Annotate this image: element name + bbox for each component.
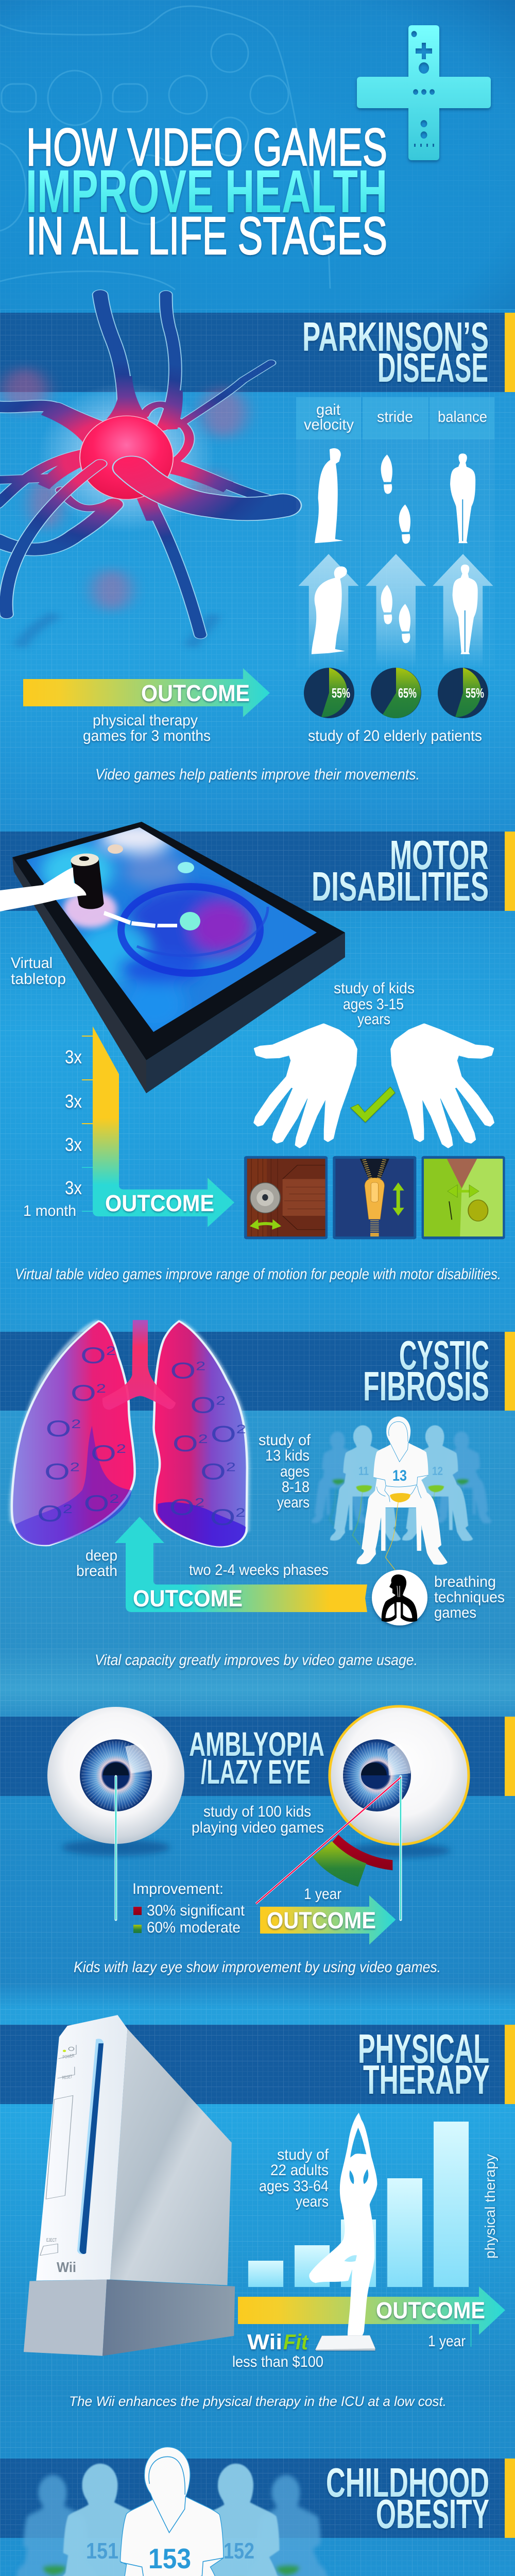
text: study of 13 kids <box>259 1432 311 1511</box>
player numbers: 13 <box>392 1467 407 1484</box>
heading: AMBLYOPIA <box>189 1725 324 1763</box>
trachea <box>102 1320 176 1410</box>
panel: physical therapy <box>0 2015 515 2409</box>
peg <box>70 852 104 909</box>
oxygen labels <box>37 1343 246 1530</box>
illustration: normal eye <box>47 1707 184 1856</box>
console labels: POWER <box>62 2053 75 2060</box>
legend: 30% significant <box>147 1902 245 1919</box>
text: study of 100 kids: study of 100 kids <box>203 1803 311 1820</box>
console labels: Wii <box>57 2259 76 2275</box>
tile: door lock <box>244 1156 328 1239</box>
accent bar <box>505 1332 515 1411</box>
oxygen labels: 2 <box>70 1460 80 1474</box>
panel: header <box>0 0 515 309</box>
text: 1 year: 1 year <box>304 1886 341 1903</box>
game dots <box>104 844 200 930</box>
logo: Wii Fit: Fit <box>283 2330 309 2354</box>
accent bar <box>505 1717 515 1796</box>
panel: amblyopia <box>0 1706 515 1976</box>
illustration: seated players <box>4 2447 343 2576</box>
oxygen labels: 2 <box>236 1422 246 1436</box>
oxygen labels: 2 <box>109 1492 119 1506</box>
text: study of 22 adults: ages 33-64 <box>259 2178 329 2195</box>
oxygen labels: O <box>211 1421 236 1447</box>
text: study of 13 kids: 8-18 <box>282 1479 310 1496</box>
player numbers: 151 <box>86 2538 118 2564</box>
oxygen labels: O <box>37 1501 63 1527</box>
chart: improvement wedges <box>313 1835 392 1887</box>
caption: Kids with lazy eye show improvement by using video games. <box>74 1959 441 1976</box>
text: breathing techniques games: games <box>434 1604 476 1621</box>
caption: Vital capacity greatly improves by video game usage. <box>95 1652 418 1669</box>
label: virtual tabletop: Virtual <box>11 955 53 972</box>
column label: gait velocity: gait <box>316 401 341 418</box>
caption: The Wii enhances the physical therapy in the ICU at a low cost. <box>69 2394 447 2409</box>
text: price: less than $100 <box>232 2353 323 2370</box>
section band <box>0 2459 515 2538</box>
gaze lines <box>116 1776 401 1920</box>
oxygen labels: 2 <box>195 1496 204 1510</box>
text: study of 13 kids: ages <box>280 1463 310 1480</box>
oxygen labels: O <box>46 1415 71 1442</box>
icon: tree pose figure <box>309 2113 377 2342</box>
illustration: seated players <box>312 1416 492 1570</box>
oxygen labels: 2 <box>96 1382 106 1395</box>
background controller outline <box>0 6 330 290</box>
player numbers: 152 <box>224 2538 254 2564</box>
oxygen labels: O <box>71 1380 96 1406</box>
timeline labels: 3x <box>65 1046 82 1067</box>
heading <box>358 2026 490 2103</box>
logo: Wii Fit <box>247 2330 309 2354</box>
section band <box>0 1332 515 1411</box>
text: study of kids: study of kids <box>334 980 415 997</box>
section band <box>0 832 515 911</box>
text: therapy duration: games for 3 months <box>83 727 211 744</box>
oxygen labels: 2 <box>63 1502 73 1516</box>
section band <box>0 1717 515 1796</box>
arrow: outcome <box>115 1517 367 1612</box>
text: deep breath <box>76 1547 117 1580</box>
panel: Parkinson's disease <box>0 295 515 783</box>
oxygen labels: O <box>91 1440 116 1466</box>
oxygen labels: 2 <box>226 1460 236 1474</box>
text: study of 22 adults <box>259 2146 329 2210</box>
column label: gait velocity: velocity <box>304 416 354 433</box>
oxygen labels: 2 <box>71 1417 81 1431</box>
arrow: monthly timeline <box>82 1026 234 1227</box>
text: study of kids <box>334 980 415 1028</box>
console labels: EJECT <box>46 2238 57 2243</box>
pie chart: balance 55% <box>438 668 488 718</box>
icon: check mark <box>351 1087 395 1122</box>
text: study of 22 adults: years <box>296 2193 329 2210</box>
text: therapy duration: physical therapy <box>93 712 198 729</box>
icon: Wii remote cross <box>357 25 491 160</box>
text: study of 13 kids: 13 kids <box>265 1447 310 1464</box>
timeline labels: 3x <box>65 1091 82 1112</box>
oxygen labels: 2 <box>196 1359 205 1373</box>
outcome label: OUTCOME <box>376 2297 485 2324</box>
marker line <box>471 2324 472 2347</box>
accent bar <box>505 832 515 911</box>
player numbers: 12 <box>432 1464 443 1478</box>
tile: zipper <box>333 1156 416 1239</box>
column label: balance: balance <box>438 409 487 426</box>
logo: Wii Fit: Wii <box>247 2330 282 2354</box>
title <box>26 117 387 265</box>
icon: balance board <box>315 2335 375 2350</box>
oxygen labels: O <box>210 1504 235 1530</box>
accent bar <box>505 2025 515 2104</box>
timeline labels: 3x <box>65 1177 82 1198</box>
heading <box>363 1332 489 1409</box>
arrow: outcome <box>238 2286 505 2335</box>
text: 1 year: 1 year <box>428 2333 466 2350</box>
oxygen labels: 2 <box>116 1442 126 1456</box>
text: study of 100 kids <box>192 1803 324 1836</box>
oxygen labels: O <box>200 1459 226 1484</box>
illustration: lazy eye <box>330 1706 469 1858</box>
player numbers: 11 <box>358 1464 369 1478</box>
caption: Video games help patients improve their movements. <box>95 766 420 783</box>
panel: motor disabilities <box>0 822 515 1283</box>
arrow: outcome <box>23 668 270 717</box>
section band <box>0 313 515 392</box>
pie chart: stride 65% <box>371 668 421 718</box>
column label: stride: stride <box>377 409 413 426</box>
heading: /LAZY EYE <box>201 1753 311 1791</box>
console labels <box>46 2053 76 2275</box>
panel: childhood obesity <box>0 2447 515 2576</box>
text: breathing techniques games: techniques <box>434 1589 505 1606</box>
text: therapy duration <box>83 712 211 744</box>
player numbers <box>358 1464 443 1484</box>
oxygen labels: O <box>190 1392 216 1418</box>
text: breathing techniques games: breathing <box>434 1573 496 1590</box>
icon: hand <box>0 868 86 911</box>
text: study of 22 adults: 22 adults <box>270 2162 329 2179</box>
legend <box>132 1880 245 1936</box>
oxygen labels: 2 <box>198 1432 208 1446</box>
axis label: physical therapy: physical therapy <box>482 2154 498 2259</box>
player numbers: 153 <box>148 2543 191 2574</box>
panel: cystic fibrosis <box>0 1320 515 1669</box>
section band <box>0 2025 515 2104</box>
heading <box>326 2460 489 2537</box>
timeline labels: 3x <box>65 1134 82 1155</box>
oxygen labels: O <box>173 1431 198 1456</box>
text: study of kids: ages 3-15 <box>343 996 404 1013</box>
oxygen labels: O <box>169 1494 195 1520</box>
pie chart: balance 55%: 55% <box>466 685 484 701</box>
outcome label: OUTCOME <box>267 1907 376 1934</box>
illustration: Wii console <box>24 2015 235 2356</box>
header glow <box>0 0 515 309</box>
text: deep breath: breath <box>76 1563 117 1580</box>
oxygen labels: O <box>170 1358 196 1383</box>
accent bar <box>505 313 515 392</box>
text: study of 13 kids: years <box>277 1494 310 1511</box>
icons: figures and improvement arrows <box>298 448 493 668</box>
chart: study columns <box>296 397 494 718</box>
player numbers <box>86 2538 254 2574</box>
legend: 60% moderate <box>147 1919 241 1936</box>
timeline labels <box>23 1046 82 1219</box>
console labels: RESET <box>62 2074 73 2080</box>
oxygen labels: 2 <box>216 1394 226 1408</box>
heading <box>189 1725 324 1791</box>
legend: Improvement: <box>132 1880 224 1897</box>
bar chart <box>248 2122 469 2287</box>
oxygen labels: O <box>84 1490 109 1516</box>
text: deep breath: deep <box>85 1547 117 1564</box>
heading <box>302 314 489 391</box>
pie chart: gait velocity 55%: 55% <box>332 685 350 701</box>
oxygen labels: 2 <box>235 1506 245 1519</box>
outcome label: OUTCOME <box>105 1190 214 1216</box>
text: breathing techniques games <box>434 1573 505 1621</box>
outcome label: OUTCOME <box>133 1585 243 1612</box>
accent bar <box>505 2459 515 2538</box>
illustration: virtual tabletop <box>0 822 345 1093</box>
text: study of 22 adults: study of <box>277 2146 329 2163</box>
oxygen labels: 2 <box>106 1344 116 1358</box>
pie chart: stride 65%: 65% <box>398 685 417 701</box>
pie chart: gait velocity 55% <box>304 668 354 718</box>
timeline labels: 1 month <box>23 1202 76 1219</box>
icon: breathing lungs <box>372 1570 427 1625</box>
label: virtual tabletop: tabletop <box>11 971 66 988</box>
illustration: neuron <box>0 295 283 647</box>
text: study of kids: years <box>357 1011 390 1028</box>
label: virtual tabletop <box>11 955 66 988</box>
illustration: lungs <box>12 1320 247 1547</box>
column label: gait velocity <box>304 401 354 433</box>
text: phases: two 2-4 weeks phases <box>189 1562 329 1579</box>
outcome label: OUTCOME <box>141 680 250 706</box>
text: study size: study of 20 elderly patients <box>308 727 482 744</box>
text: study of 100 kids: playing video games <box>192 1819 324 1836</box>
oxygen labels: O <box>44 1459 70 1484</box>
heading <box>312 832 489 909</box>
text: study of 13 kids: study of <box>259 1432 311 1449</box>
oxygen labels: O <box>80 1343 106 1368</box>
icon: hands <box>254 1024 493 1147</box>
tile: buttoned jacket <box>422 1156 505 1239</box>
arrow: outcome <box>260 1895 396 1944</box>
